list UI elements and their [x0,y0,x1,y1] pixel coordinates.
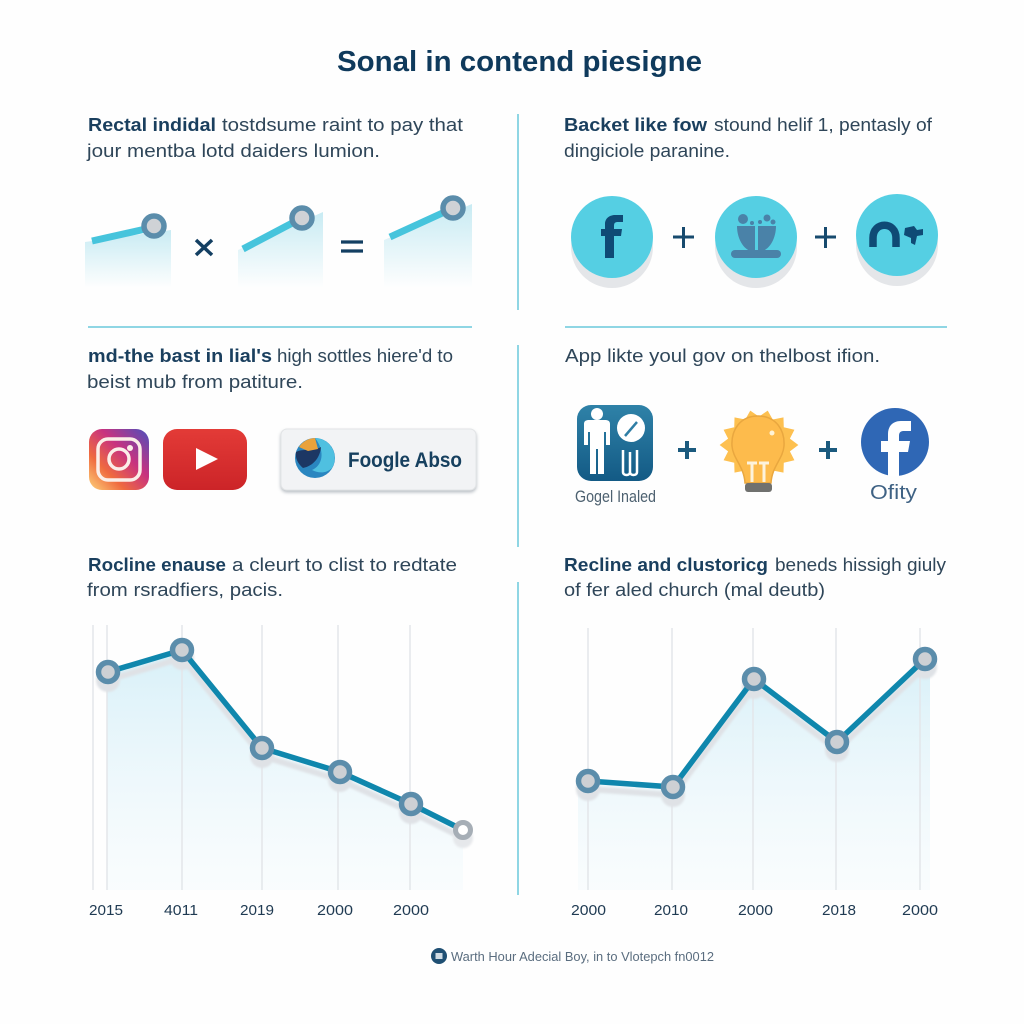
label: app tile: Gogel Inaled [575,487,656,506]
icon: plus two [815,227,836,248]
axis labels: 4011 [164,902,198,919]
button: logo badge [281,429,476,490]
axis labels: 2019 [240,902,274,919]
axis labels: 2015 [89,902,123,919]
icon: multiply sign [196,240,212,255]
icon: video play [163,429,247,490]
text block: bottom right description: beneds hissigh giuly [775,555,946,575]
icon: circle plant [715,196,797,288]
axis labels: 2000 [317,902,353,919]
icon: light bulb [720,411,798,492]
icon: mini chart three [384,198,472,288]
icon: circle arch [856,194,938,286]
panel: bottom left chart [87,555,473,919]
text block: bottom left description: from rsradfiers, pacis. [87,580,283,600]
axis labels [571,902,938,919]
text block: bottom right description: of fer aled church (mal deutb) [564,580,825,600]
icon: plus three [678,441,696,459]
text block: middle left description [87,346,453,392]
title: Sonal in contend piesigne [337,46,702,78]
text block: top left description: jour mentba lotd daiders lumion. [86,141,380,161]
button: logo badge: Foogle Abso [348,449,462,472]
icon: plus one [673,227,694,248]
line chart: rising trend [571,628,938,919]
axis labels [89,902,429,919]
icon: mini chart one [85,216,171,288]
icon: app tile with figure [577,405,653,481]
axis labels: 2000 [393,902,429,919]
icon: plus four [819,441,837,459]
icon: blue f circle [861,408,929,476]
panel: bottom right chart [564,555,946,919]
text block: bottom left description [87,555,457,600]
icon: mini chart two [238,208,323,288]
panel: middle left logos [87,346,476,490]
text block: middle left description: md-the bast in lial's [88,346,272,366]
icon: equals sign [341,242,363,251]
text block: middle left description: high sottles hiere'd to [277,346,453,366]
text block: bottom right description [564,555,946,600]
text block: bottom left description: a cleurt to clist to redtate [232,555,457,575]
icon: circle f [571,196,653,288]
text block: middle left description: beist mub from patiture. [87,372,303,392]
data points [98,640,470,838]
text block: top right description: stound helif 1, pentasly of [714,115,933,135]
panel: middle right icons [565,346,929,506]
text block: top right description [564,115,933,161]
text block: top right description: dingiciole paranine. [564,141,730,161]
footer note: Warth Hour Adecial Boy, in to Vlotepch fn0012 [451,949,714,964]
text block: middle right description: App likte youl gov on thelbost ifion. [565,346,880,366]
text block: top left description: Rectal indidal [88,115,216,135]
text block: top right description: Backet like fow [564,115,708,135]
axis labels: 2000 [902,902,938,919]
line chart: falling trend [89,625,473,919]
text block: bottom left description: Rocline enause [88,555,226,575]
icon: camera app [89,429,149,490]
panel: top left formula [85,115,472,288]
label: blue f circle: Ofity [870,482,917,504]
text block: bottom right description: Recline and clustoricg [564,555,768,575]
axis labels: 2010 [654,902,688,919]
axis labels: 2018 [822,902,856,919]
axis labels: 2000 [738,902,773,919]
panel: top right icons [564,115,938,288]
data points [578,650,934,796]
text block: top left description: tostdsume raint to pay that [222,115,463,135]
axis labels: 2000 [571,902,606,919]
text block: top left description [86,115,463,161]
